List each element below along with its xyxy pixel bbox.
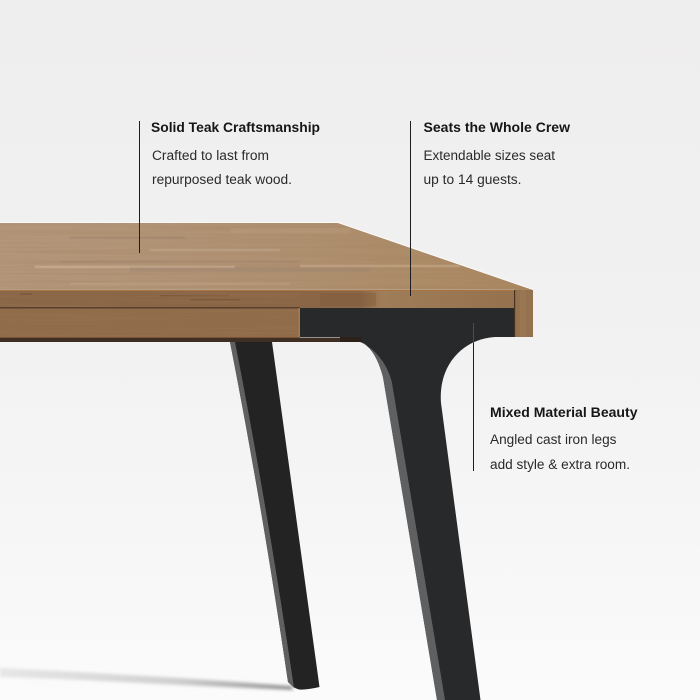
callout: Solid Teak Craftsmanship: repurposed teak wood. bbox=[152, 172, 292, 187]
callout: Seats the Whole Crew: Extendable sizes seat bbox=[424, 148, 555, 163]
floor shadow of back leg bbox=[0, 668, 293, 690]
table end grain bbox=[514, 290, 533, 337]
callout: Mixed Material Beauty bbox=[473, 323, 638, 472]
callout: Seats the Whole Crew bbox=[410, 120, 571, 296]
callout: Mixed Material Beauty: Mixed Material Beauty bbox=[490, 405, 638, 420]
callout: Solid Teak Craftsmanship: Solid Teak Craftsmanship bbox=[151, 120, 320, 135]
callout: Solid Teak Craftsmanship: Crafted to last from bbox=[152, 148, 269, 163]
table top surface bbox=[0, 222, 533, 290]
callout: Seats the Whole Crew: Seats the Whole Crew bbox=[424, 120, 571, 135]
callout: Mixed Material Beauty: add style & extra room. bbox=[490, 457, 630, 472]
callout: Solid Teak Craftsmanship bbox=[139, 120, 320, 253]
table front edge bbox=[0, 290, 515, 308]
callout: Seats the Whole Crew: up to 14 guests. bbox=[424, 172, 522, 187]
table apron bbox=[0, 290, 362, 342]
front table leg and bracket bbox=[300, 308, 515, 700]
back table leg bbox=[230, 342, 320, 690]
callout: Mixed Material Beauty: Angled cast iron legs bbox=[490, 432, 617, 447]
